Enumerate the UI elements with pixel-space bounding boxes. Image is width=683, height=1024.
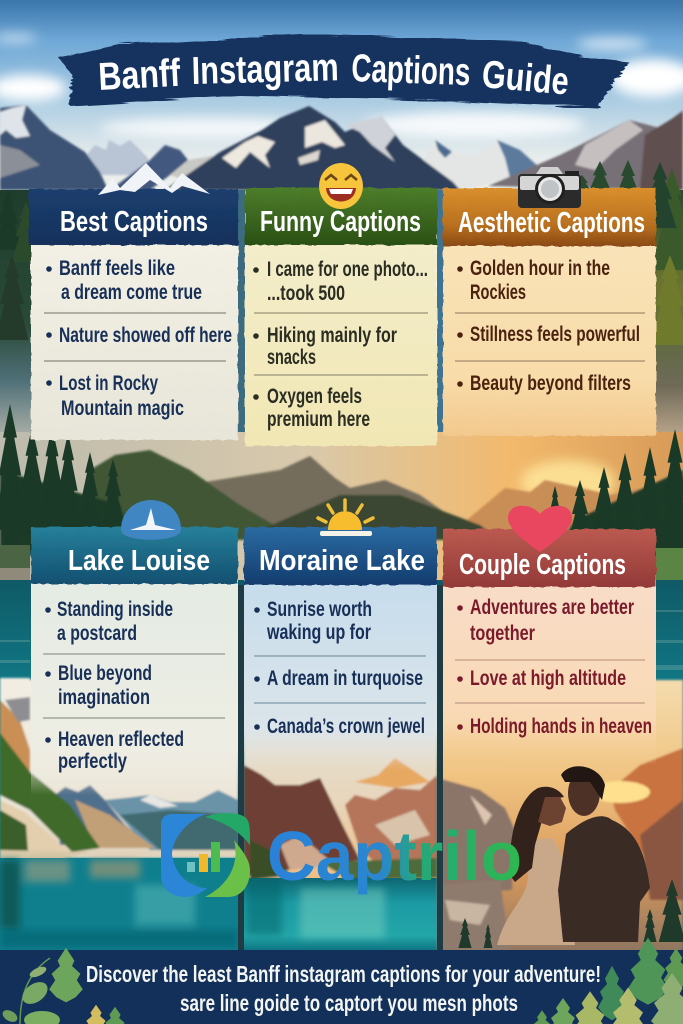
forest trees: [0, 160, 683, 345]
captions list: [254, 598, 425, 738]
captions list: Heaven reflected: [58, 728, 184, 751]
captions list: ...took 500: [267, 282, 345, 305]
panel: Lake Louise: [31, 500, 238, 795]
captions list: Canada’s crown jewel: [267, 715, 425, 738]
captions list: waking up for: [266, 621, 371, 644]
foreground trees: [458, 879, 683, 948]
captions list: Banff feels like: [59, 257, 175, 280]
background: forest right: [440, 190, 683, 435]
panel: Couple Captions: [443, 506, 656, 765]
title words: Captions: [351, 47, 471, 94]
captions list: snacks: [267, 346, 316, 369]
captions list: Nature showed off here: [59, 324, 232, 347]
captions list: Beauty beyond filters: [470, 372, 631, 395]
panel dividers: [238, 585, 443, 950]
captions list: [457, 257, 640, 395]
captions list: Sunrise worth: [267, 598, 372, 621]
captions list: a postcard: [57, 622, 137, 645]
heading: Lake Louise: [68, 545, 210, 577]
captions list: Love at high altitude: [470, 667, 626, 690]
icon: logo mark: [161, 813, 250, 897]
captions list: premium here: [267, 408, 370, 431]
scene: left: [0, 678, 238, 862]
couple silhouette: [497, 766, 650, 945]
trees: [0, 404, 683, 572]
icon: left leaves: [1, 948, 126, 1024]
scene: middle: [244, 680, 437, 880]
icon: right leaves: [532, 938, 683, 1024]
lake margin streaks: [0, 610, 683, 670]
scene: left lake: [0, 858, 238, 950]
woman face: [538, 797, 566, 826]
title words: [97, 46, 571, 104]
panel: Aesthetic Captions: [443, 167, 656, 436]
captions list: A dream in turquoise: [267, 667, 423, 690]
captions list: perfectly: [58, 750, 127, 773]
captions list: a dream come true: [61, 281, 202, 304]
panel: Best Captions: [29, 163, 238, 440]
captions list: Adventures are better: [470, 596, 634, 619]
captions list: Mountain magic: [61, 397, 184, 420]
tree mass: [0, 470, 683, 565]
icon: mountains: [98, 163, 210, 195]
background: sky: [0, 0, 683, 198]
panel: Funny Captions: [245, 163, 437, 446]
heading: Funny Captions: [260, 206, 421, 238]
captions list: Rockies: [470, 281, 526, 304]
icon: heart: [508, 506, 572, 552]
heading: Moraine Lake: [259, 545, 425, 577]
footer band: [0, 938, 683, 1024]
shore strips: [0, 545, 683, 582]
captions list: [45, 598, 184, 773]
card gap fills: [238, 190, 443, 440]
scene: right: [437, 680, 683, 952]
mid mountains: [90, 450, 683, 560]
wordmark: Captrilo: [267, 817, 522, 895]
man hair: [561, 766, 605, 800]
background: mountains top: [0, 105, 683, 190]
man body: [558, 816, 650, 942]
captions list: Hiking mainly for: [267, 324, 397, 347]
clouds: [0, 34, 683, 138]
heading: Best Captions: [60, 206, 208, 238]
panel: Moraine Lake: [244, 500, 437, 770]
footer band: sare line goide to captort you mesn phots: [180, 990, 518, 1016]
lake reflections left: [0, 860, 238, 948]
captions list: together: [470, 622, 535, 645]
man head: [568, 770, 600, 816]
icon: camera: [518, 167, 581, 208]
lake reflections middle: [246, 880, 385, 938]
title words: Guide: [480, 53, 571, 104]
captions list: I came for one photo...: [267, 258, 428, 281]
icon: sun: [318, 500, 373, 536]
sun glow: [520, 460, 616, 504]
title banner: [59, 34, 629, 108]
scene: middle lake: [244, 878, 437, 950]
captions list: Standing inside: [57, 598, 173, 621]
title words: Instagram: [191, 46, 339, 93]
background: forest left: [0, 190, 240, 435]
captions list: [46, 257, 232, 420]
captions list: [457, 596, 652, 738]
captions list: Golden hour in the: [470, 257, 610, 280]
icon: lake dome: [121, 500, 181, 540]
captions list: Oxygen feels: [267, 385, 362, 408]
captions list: imagination: [58, 686, 150, 709]
captions list: Blue beyond: [58, 662, 152, 685]
captions list: Lost in Rocky: [59, 372, 158, 395]
woman hair: [510, 787, 564, 882]
heading: Couple Captions: [459, 549, 626, 581]
logo: Captrilo: [161, 813, 522, 897]
background: lake: [0, 580, 683, 952]
background: sunset valley: [0, 432, 683, 592]
captions list: [253, 258, 428, 431]
woman dress: [497, 838, 575, 945]
title words: Banff: [97, 52, 182, 99]
icon: laughing emoji: [319, 163, 363, 209]
